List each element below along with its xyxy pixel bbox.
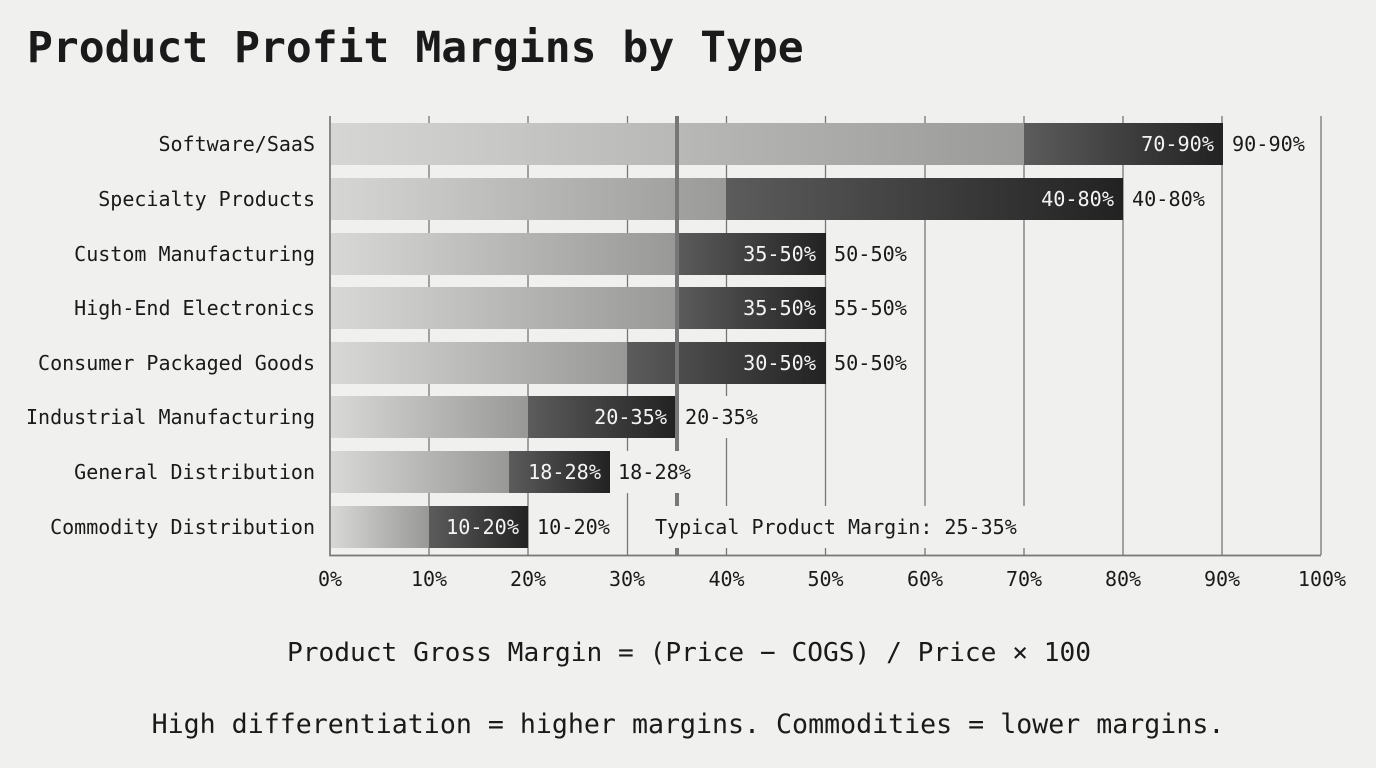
row: Specialty Products: [98, 178, 1205, 220]
row: Industrial Manufacturing: Industrial Manufacturing: [26, 405, 315, 429]
x axis labels: 70%: [1006, 567, 1042, 591]
row: Software/SaaS: Software/SaaS: [158, 132, 315, 156]
row: Consumer Packaged Goods: Consumer Packaged Goods: [38, 351, 315, 375]
x axis labels: 20%: [510, 567, 546, 591]
takeaway: High differentiation = higher margins. Commodities = lower margins.: [152, 709, 1224, 740]
row: Commodity Distribution: 10-20%: [446, 515, 519, 539]
row: Software/SaaS: 70-90%: [1141, 132, 1214, 156]
row: General Distribution: 18-28%: [528, 460, 601, 484]
row: Specialty Products: Specialty Products: [98, 187, 315, 211]
callout: typical product margin: [648, 506, 1027, 548]
x axis labels: 90%: [1204, 567, 1240, 591]
row: Industrial Manufacturing: [26, 396, 765, 438]
axes: [330, 116, 1321, 556]
row: Custom Manufacturing: 50-50%: [834, 242, 907, 266]
x axis labels: 100%: [1298, 567, 1346, 591]
row: Software/SaaS: [158, 123, 1305, 165]
row: Industrial Manufacturing: 20-35%: [685, 405, 758, 429]
row: High-End Electronics: 35-50%: [743, 296, 816, 320]
row: High-End Electronics: 55-50%: [834, 296, 907, 320]
x axis labels: 10%: [411, 567, 447, 591]
row: Custom Manufacturing: Custom Manufacturing: [74, 242, 315, 266]
callout: typical product margin: Typical Product Margin: 25-35%: [655, 515, 1017, 539]
x axis labels: 50%: [807, 567, 844, 591]
row: Custom Manufacturing: 35-50%: [743, 242, 816, 266]
x axis labels: 60%: [907, 567, 943, 591]
row: Specialty Products: 40-80%: [1041, 187, 1114, 211]
x axis labels: 40%: [708, 567, 745, 591]
row: General Distribution: [74, 451, 698, 493]
row: Consumer Packaged Goods: [38, 342, 907, 384]
row: Commodity Distribution: 10-20%: [537, 515, 610, 539]
x axis labels: [318, 567, 1346, 591]
row: Specialty Products: 40-80%: [1132, 187, 1205, 211]
formula: Product Gross Margin = (Price − COGS) / Price × 100: [287, 638, 1091, 668]
row: Consumer Packaged Goods: 30-50%: [743, 351, 816, 375]
row: Commodity Distribution: Commodity Distribution: [50, 515, 315, 539]
grid lines: [429, 116, 1321, 555]
row: Consumer Packaged Goods: 50-50%: [834, 351, 907, 375]
x axis labels: 30%: [609, 567, 645, 591]
row: Industrial Manufacturing: 20-35%: [594, 405, 667, 429]
row: Custom Manufacturing: [74, 233, 907, 275]
row: Commodity Distribution: [50, 506, 610, 548]
row: High-End Electronics: [74, 287, 907, 329]
row: General Distribution: 18-28%: [618, 460, 691, 484]
x axis labels: 0%: [318, 567, 342, 591]
row: High-End Electronics: High-End Electronics: [74, 296, 315, 320]
typical margin marker line: [675, 116, 679, 555]
title: Product Profit Margins by Type: [27, 23, 804, 73]
row: Software/SaaS: 90-90%: [1232, 132, 1305, 156]
row: General Distribution: General Distribution: [74, 460, 315, 484]
x axis labels: 80%: [1105, 567, 1141, 591]
